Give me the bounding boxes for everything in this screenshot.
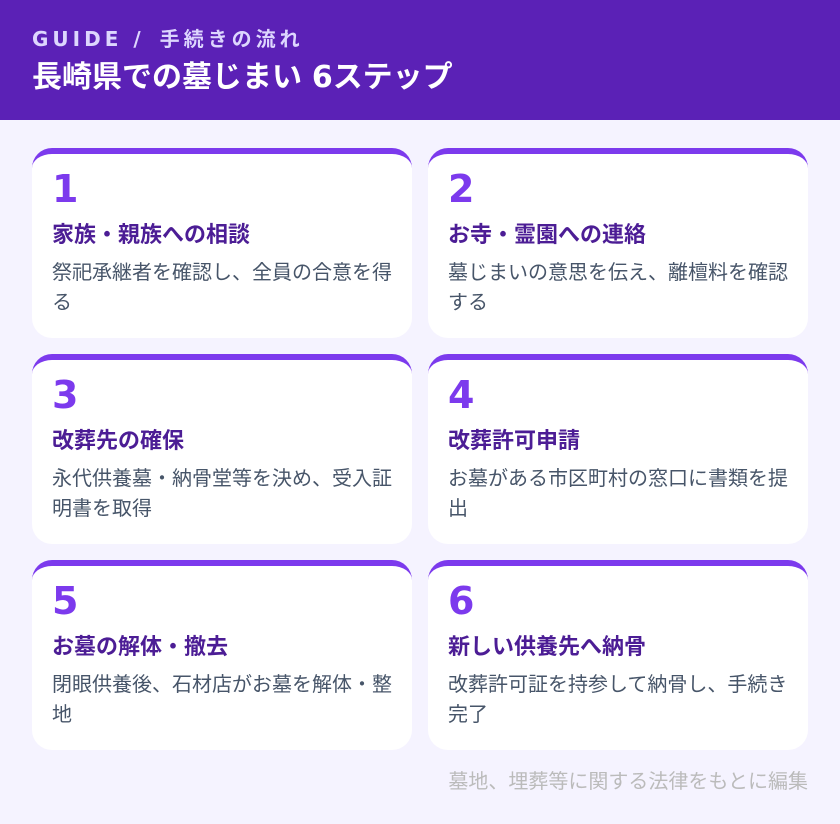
panel: step 2 xyxy=(428,148,808,338)
step 5 heading: お墓の解体・撤去 xyxy=(52,629,228,661)
step number 1: 1 xyxy=(52,167,78,211)
source footnote: 墓地、埋葬等に関する法律をもとに編集 xyxy=(448,765,808,794)
step number 6: 6 xyxy=(448,579,474,623)
step number 2: 2 xyxy=(448,167,474,211)
step number 5: 5 xyxy=(52,579,78,623)
eyebrow label: GUIDE / 手続きの流れ xyxy=(32,23,304,52)
step 2 heading: お寺・霊園への連絡 xyxy=(448,217,646,249)
step 2 description: 墓じまいの意思を伝え、離檀料を確認する xyxy=(448,256,788,315)
panel: step 5 xyxy=(32,560,412,750)
step 6 heading: 新しい供養先へ納骨 xyxy=(448,629,646,661)
step 4 description: お墓がある市区町村の窓口に書類を提出 xyxy=(448,462,788,521)
step 3 description: 永代供養墓・納骨堂等を決め、受入証明書を取得 xyxy=(52,462,392,521)
step 1 heading: 家族・親族への相談 xyxy=(52,217,250,249)
step 3 heading: 改葬先の確保 xyxy=(52,423,184,455)
panel: step 6 xyxy=(428,560,808,750)
step 1 description: 祭祀承継者を確認し、全員の合意を得る xyxy=(52,256,392,315)
step number 3: 3 xyxy=(52,373,78,417)
header band xyxy=(0,0,840,120)
step number 4: 4 xyxy=(448,373,474,417)
panel: step 3 xyxy=(32,354,412,544)
panel: step 1 xyxy=(32,148,412,338)
step 6 description: 改葬許可証を持参して納骨し、手続き完了 xyxy=(448,668,787,727)
step 4 heading: 改葬許可申請 xyxy=(448,423,580,455)
panel: step 4 xyxy=(428,354,808,544)
step 5 description: 閉眼供養後、石材店がお墓を解体・整地 xyxy=(52,668,392,727)
title: 長崎県での墓じまい 6ステップ xyxy=(32,52,453,96)
